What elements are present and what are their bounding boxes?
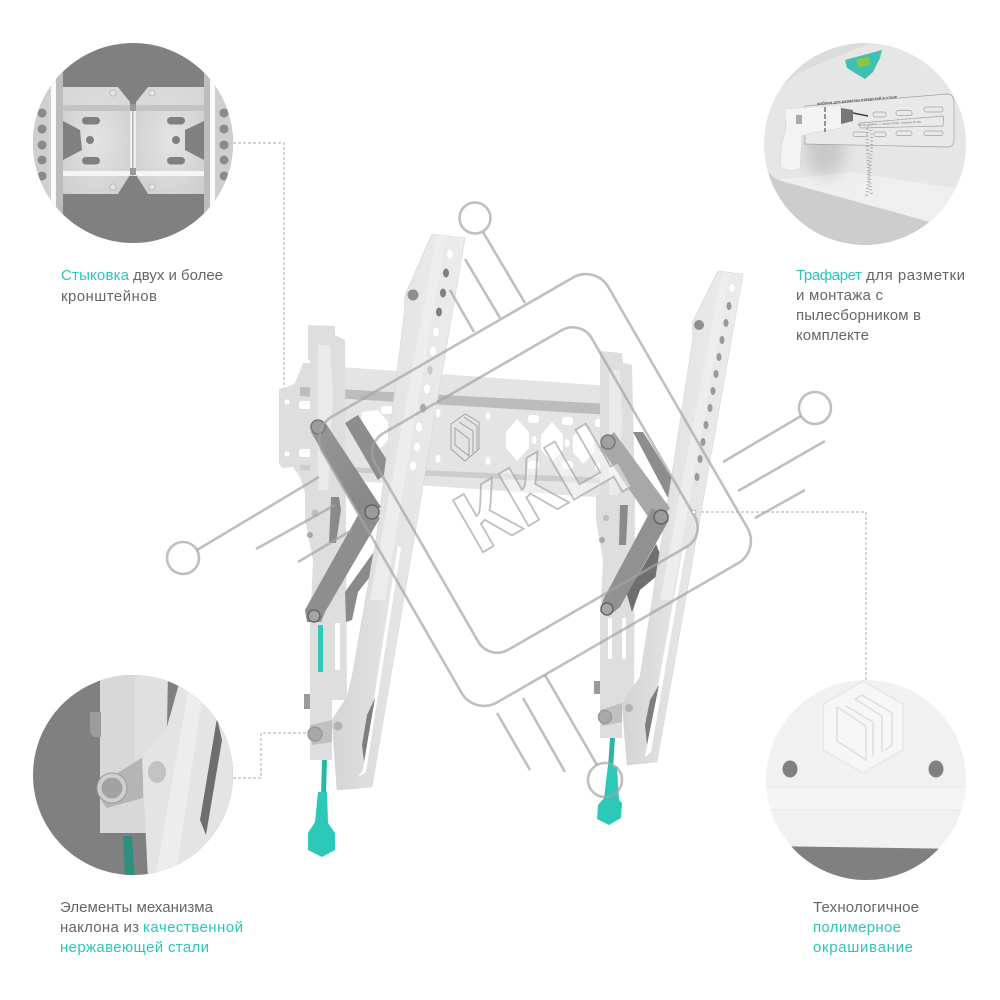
text block: template: и монтажа с bbox=[796, 287, 884, 304]
icon: plate logo bbox=[451, 414, 479, 461]
watermark node: top bbox=[450, 202, 525, 332]
right plate bbox=[136, 87, 204, 194]
floor bbox=[768, 173, 930, 245]
left curved arm bbox=[345, 553, 377, 622]
text block: template: для разметки bbox=[866, 267, 965, 284]
plate cut-outs bbox=[284, 400, 606, 471]
teal strip bbox=[123, 836, 135, 875]
watermark frame inner bbox=[364, 319, 706, 661]
text block: mechanism bbox=[60, 899, 243, 956]
text block: template: комплекте bbox=[796, 327, 869, 344]
text block: mechanism: Элементы механизма bbox=[60, 899, 214, 916]
left teal handle bbox=[308, 792, 335, 857]
text block: mechanism: наклона из bbox=[60, 919, 139, 936]
panel: drilling template photo bbox=[764, 43, 966, 245]
pivot pin bbox=[97, 773, 127, 803]
left hanger plate bbox=[305, 325, 347, 760]
left front arms bbox=[305, 420, 381, 622]
template note: Бетон, кирпич — сверло 8 мм, глубина 50 мм bbox=[858, 120, 921, 127]
text block: coating: Технологичное bbox=[813, 899, 919, 916]
left rail holes bbox=[408, 250, 453, 470]
right rail holes bbox=[694, 284, 734, 481]
right clip bbox=[594, 681, 600, 694]
wall plate bbox=[340, 367, 610, 498]
text block: template bbox=[796, 267, 965, 344]
right rail slot bbox=[645, 548, 686, 757]
rail rivet bbox=[148, 761, 166, 783]
watermark letters: ККЦ bbox=[439, 403, 633, 571]
text block: coating bbox=[813, 899, 919, 956]
link arm bbox=[100, 757, 143, 808]
text block: template: пылесборником в bbox=[796, 307, 921, 324]
text block: coating: полимерное bbox=[813, 919, 901, 936]
watermark node: left bbox=[167, 477, 352, 574]
dark gap bbox=[167, 681, 178, 726]
panel: docking detail photo bbox=[33, 43, 233, 243]
leader line: coating callout bbox=[695, 512, 866, 680]
leader line: docking callout bbox=[233, 143, 284, 387]
logo embossed bbox=[836, 694, 892, 761]
right hanger plate bbox=[596, 351, 635, 738]
right cord bbox=[608, 738, 615, 768]
right curved arm bbox=[625, 544, 661, 612]
ledge bbox=[778, 172, 966, 222]
leader line: mechanism callout bbox=[233, 733, 307, 778]
text block: docking: Стыковка bbox=[61, 267, 130, 284]
rail slot bbox=[200, 718, 222, 835]
left tilt rail bbox=[332, 234, 465, 790]
left back arm bbox=[345, 415, 392, 480]
watermark node: bottom bbox=[497, 675, 622, 797]
text block: docking bbox=[61, 267, 223, 305]
right back arm bbox=[633, 432, 672, 498]
panel: coating detail photo bbox=[766, 680, 966, 880]
right rail bbox=[204, 73, 210, 213]
text block: docking: двух и более bbox=[133, 267, 223, 284]
chamfer cut corners bbox=[118, 87, 148, 102]
wall top shade bbox=[783, 43, 869, 85]
left rail bbox=[33, 86, 51, 200]
watermark frame outer bbox=[310, 265, 760, 715]
watermark bbox=[167, 202, 831, 797]
bracket product bbox=[279, 234, 743, 857]
template slots bbox=[853, 107, 944, 136]
left lower mechanism bbox=[329, 497, 341, 543]
text block: mechanism: качественной bbox=[143, 919, 243, 936]
right tilt rail bbox=[622, 271, 743, 765]
template caption: шаблон для разметки отверстий в стене bbox=[817, 94, 898, 106]
panel: tilt mechanism photo bbox=[33, 672, 233, 880]
left bottom pivot bbox=[308, 720, 342, 745]
leader end dot bbox=[692, 510, 696, 514]
tilt rail bbox=[142, 680, 233, 880]
wall plate: left end bbox=[279, 363, 318, 495]
hook bbox=[90, 712, 101, 737]
right front arms bbox=[600, 432, 670, 615]
text block: mechanism: нержавеющей стали bbox=[60, 939, 209, 956]
right bottom pivot bbox=[598, 703, 633, 726]
teal strip in slot bbox=[318, 625, 323, 672]
mount holes bbox=[782, 760, 798, 778]
text block: docking: кронштейнов bbox=[61, 288, 157, 305]
text block: template: Трафарет bbox=[796, 267, 862, 284]
watermark node: right bbox=[723, 392, 831, 518]
right teal handle bbox=[597, 765, 622, 825]
left cord bbox=[321, 760, 327, 795]
dust bbox=[866, 125, 872, 198]
shadow of drill bbox=[805, 124, 845, 176]
template outline bbox=[805, 94, 954, 147]
icon: teal level bbox=[845, 50, 882, 79]
left plate bbox=[63, 87, 130, 194]
centre seam bbox=[130, 104, 136, 176]
text block: coating: окрашивание bbox=[813, 939, 913, 956]
left clip bbox=[304, 694, 310, 709]
back plate bbox=[100, 672, 170, 833]
left rail slot bbox=[358, 545, 401, 777]
icon: drill bbox=[781, 105, 868, 171]
